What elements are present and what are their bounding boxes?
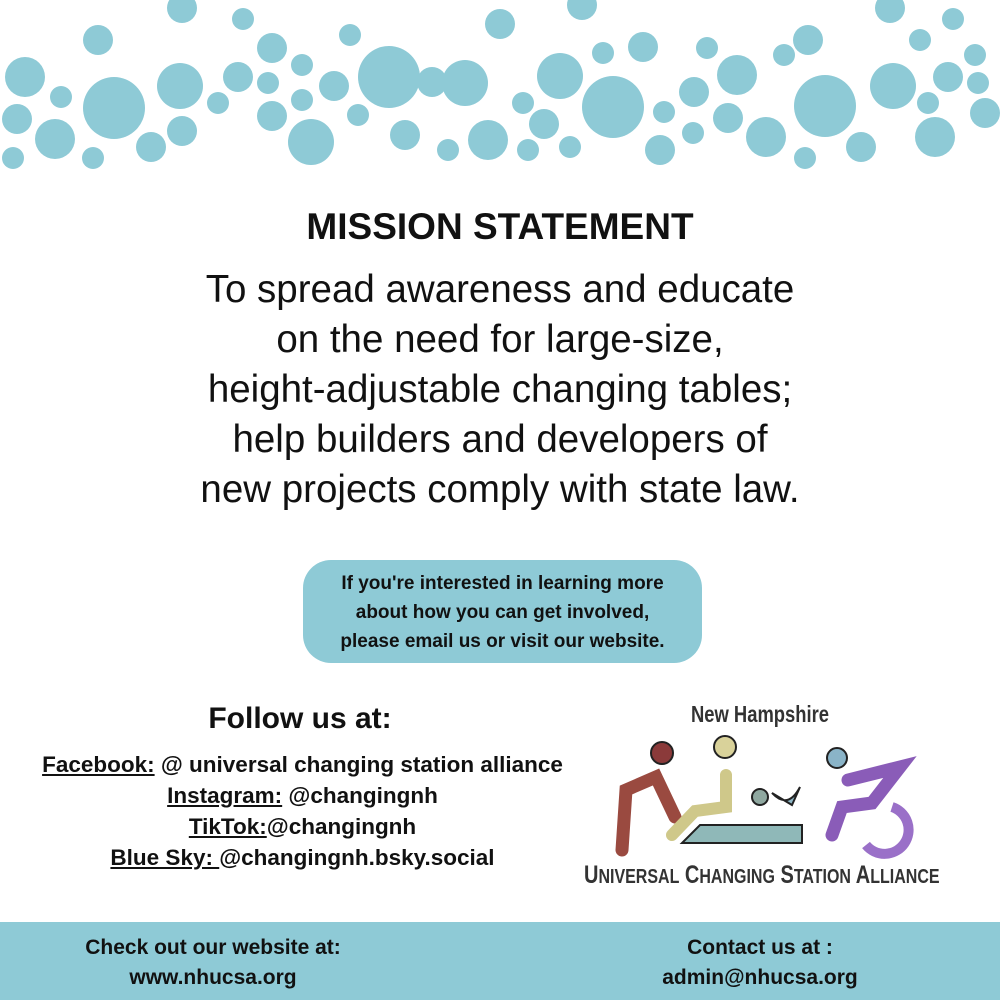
- callout pill: please email us or visit our website.: [340, 631, 665, 652]
- footer bar: [0, 922, 1000, 1000]
- mission text: height-adjustable changing tables;: [208, 368, 792, 411]
- follow heading: Follow us at:: [208, 702, 392, 735]
- social links: TikTok:@changingnh: [189, 814, 416, 839]
- logo: UNIVERSAL CHANGING STATION ALLIANCE: [584, 861, 940, 889]
- logo: [584, 701, 940, 889]
- callout pill: [303, 560, 702, 663]
- website: [85, 936, 341, 989]
- mission text: new projects comply with state law.: [200, 468, 800, 511]
- icon: sitting person and table: [672, 736, 802, 843]
- mission text: help builders and developers of: [232, 418, 768, 461]
- social links: [42, 752, 563, 870]
- social links: Facebook: @ universal changing station alliance: [42, 752, 563, 777]
- mission text: [200, 268, 800, 511]
- bubble header pattern: [2, 0, 1000, 169]
- contact: [662, 936, 858, 989]
- title: MISSION STATEMENT: [306, 206, 694, 247]
- icon: wheelchair user: [827, 748, 909, 854]
- callout pill: about how you can get involved,: [356, 602, 649, 623]
- social links: Instagram: @changingnh: [167, 783, 438, 808]
- website: www.nhucsa.org: [129, 966, 297, 989]
- contact: Contact us at :: [687, 936, 833, 959]
- mission text: on the need for large-size,: [276, 318, 724, 361]
- social links: Blue Sky: @changingnh.bsky.social: [110, 845, 495, 870]
- contact: admin@nhucsa.org: [662, 966, 858, 989]
- icon: bending person: [622, 742, 675, 850]
- logo: New Hampshire: [691, 701, 829, 727]
- callout pill: If you're interested in learning more: [341, 573, 664, 594]
- website: Check out our website at:: [85, 936, 341, 959]
- mission text: To spread awareness and educate: [206, 268, 794, 311]
